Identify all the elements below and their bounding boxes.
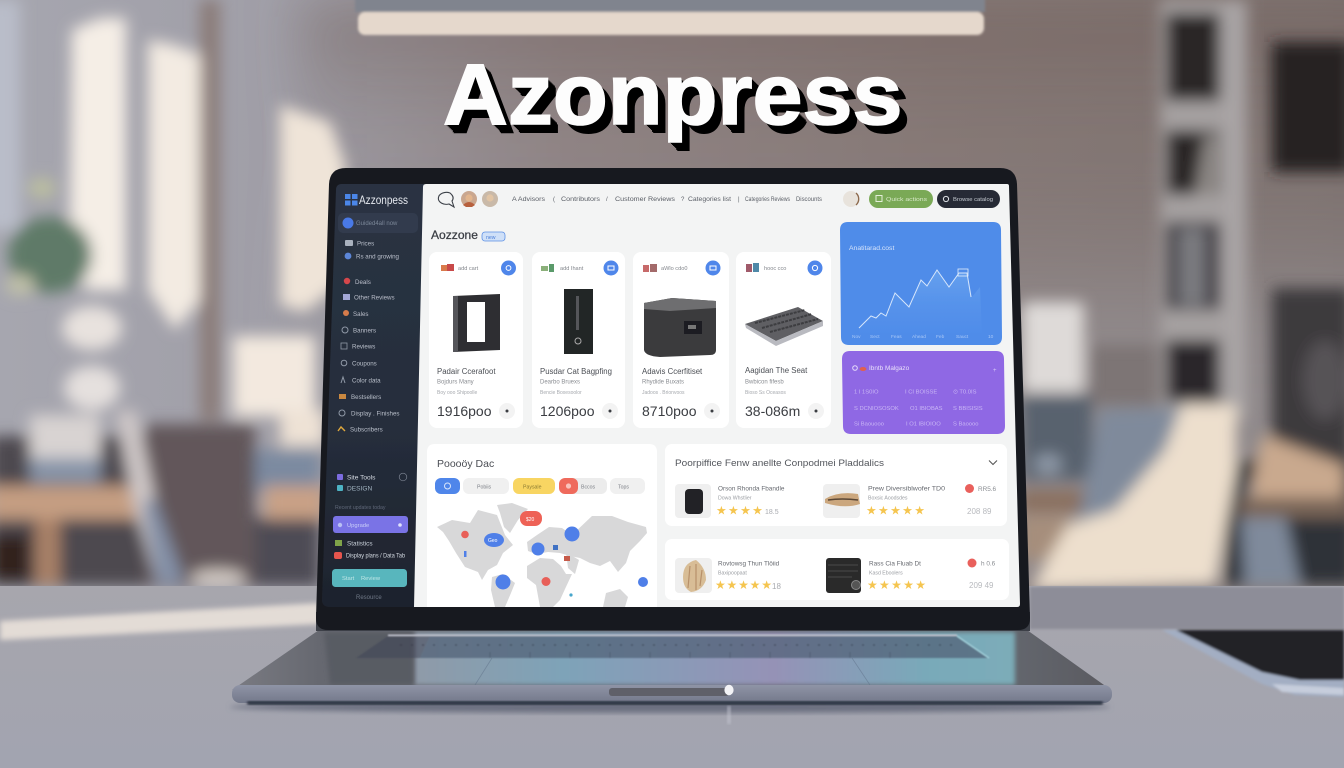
analytics chart card: Anatitarad.cost xyxy=(849,245,894,252)
product card 1: Bojdurs Many xyxy=(437,380,474,386)
purple stats card xyxy=(842,351,1005,434)
dark button: Browse catalog xyxy=(953,197,993,203)
product row D: Kasd Eboolers xyxy=(869,570,903,576)
top navigation bar: ? xyxy=(681,197,685,203)
product image: keypad xyxy=(745,307,823,346)
product card 4 xyxy=(736,252,831,428)
top navigation bar: Categories list xyxy=(688,197,731,203)
green button xyxy=(869,190,933,208)
sidebar navigation: Subscribers xyxy=(350,426,383,434)
trackpad xyxy=(475,658,870,685)
map markers: Geo xyxy=(488,538,498,544)
product card 3: aWlo cdo0 xyxy=(661,266,687,272)
top navigation bar xyxy=(438,190,1000,208)
sidebar navigation: Bestsellers xyxy=(351,394,381,401)
product card 1: Boy ooo Shipoolle xyxy=(437,390,478,396)
hinge xyxy=(316,612,1030,631)
product row D: Rass Cia Fluab Dt xyxy=(869,560,921,568)
map card xyxy=(427,444,657,607)
front notch xyxy=(609,685,734,724)
purple stats card: ⊙ T0.0IS xyxy=(953,390,977,396)
purple stats card: S Baoooo xyxy=(953,422,978,428)
purple stats card: S BBISISIS xyxy=(953,406,983,412)
product image: printer xyxy=(644,298,716,357)
product card 4: hooc cco xyxy=(764,266,786,272)
sidebar navigation: Display . Finishes xyxy=(351,410,400,418)
sidebar logo: Azzonpess xyxy=(359,193,408,207)
laptop base xyxy=(230,630,1112,724)
purple stats card: S DCNIOSOSOK xyxy=(854,406,899,412)
sidebar statistics rows xyxy=(334,540,405,560)
product row B: ★★★★★ xyxy=(866,504,926,518)
map markers xyxy=(461,511,648,597)
product card 2: 1206poo xyxy=(540,403,595,419)
analytics chart card: Feb xyxy=(936,334,945,340)
product row D xyxy=(826,558,927,593)
title: Azonpress: Azonpress xyxy=(443,47,902,143)
product row C: Baxipoopaat xyxy=(718,570,747,576)
avatars xyxy=(461,191,498,207)
heart and price B: h 0.6 xyxy=(981,560,996,568)
purple stats card: Si Baouooo xyxy=(854,422,884,428)
product row C xyxy=(675,558,781,593)
purple stats card: O1 IBIOBAS xyxy=(910,406,943,412)
filter pills: Bccos xyxy=(581,484,596,490)
product card 4: 38-086m xyxy=(745,403,800,419)
product card 2: Bencie Boxesoolor xyxy=(540,390,582,396)
sidebar logo xyxy=(345,193,408,207)
analytics chart card: Feas xyxy=(891,334,902,340)
sidebar navigation: Reviews xyxy=(352,344,375,350)
product card 1: add cart xyxy=(458,266,479,272)
filter pills: Paysale xyxy=(523,484,542,490)
start review button: Review xyxy=(361,576,381,582)
product card 4: Aagidan The Seat xyxy=(745,366,808,375)
laptop xyxy=(230,168,1112,724)
product image: frame xyxy=(453,294,500,352)
page heading: new xyxy=(486,235,496,241)
product card 2: Pusdar Cat Bagpfing xyxy=(540,367,612,376)
sidebar statistics rows: Statistics xyxy=(347,540,373,548)
sidebar tools: Site Tools xyxy=(347,474,376,482)
analytics chart card: Sect xyxy=(870,334,880,340)
sidebar navigation: Other Reviews xyxy=(354,294,395,302)
product card 1 xyxy=(429,252,523,428)
heart and price A xyxy=(965,484,997,516)
sidebar navigation xyxy=(338,240,400,434)
sidebar account row: Guided4all now xyxy=(356,221,398,227)
sidebar navigation: Deals xyxy=(355,279,371,286)
product card 3: Adavis Ccerfitiset xyxy=(642,367,703,376)
sidebar navigation: Banners xyxy=(353,328,376,334)
analytics chart card: 10 xyxy=(988,334,994,340)
main panel xyxy=(414,184,1020,607)
purple stats card: 1 I 1S0IO xyxy=(854,390,879,396)
purple stats card: Ibntb Malgazo xyxy=(869,365,910,372)
analytics chart card: Nov xyxy=(852,334,861,340)
top navigation bar: Categories Reviews xyxy=(745,197,790,203)
purple stats card: I CI BOISSE xyxy=(905,390,937,396)
upgrade button: Upgrade xyxy=(347,523,369,529)
product card 2 xyxy=(532,252,625,428)
sidebar statistics rows: Display plans / Data Tab xyxy=(346,552,405,560)
analytics chart card: Ahead xyxy=(912,334,926,340)
analytics chart card xyxy=(840,222,1002,345)
dark button xyxy=(937,190,1000,208)
area line chart xyxy=(859,269,982,333)
map markers: $20 xyxy=(526,517,535,523)
product row B xyxy=(823,484,945,518)
product row C: 18 xyxy=(772,582,781,591)
product card 3: 8710poo xyxy=(642,403,697,419)
keyboard xyxy=(356,634,989,658)
page heading xyxy=(431,230,505,242)
purple stats card: + xyxy=(993,368,997,374)
product image: black device xyxy=(564,289,593,354)
product row A: 18.5 xyxy=(765,509,779,516)
top navigation bar: ( xyxy=(553,197,555,203)
sidebar xyxy=(322,184,424,607)
popular products card top xyxy=(665,444,1007,526)
desk surface xyxy=(0,586,1344,768)
top navigation bar: Customer Reviews xyxy=(615,197,675,203)
product row A xyxy=(675,484,785,518)
sidebar footer: Resource xyxy=(356,595,382,601)
analytics chart card: Sauct xyxy=(956,334,969,340)
sidebar tools xyxy=(335,473,407,511)
heart and price B: 209 49 xyxy=(969,581,994,590)
product row A: Orson Rhonda Fbandle xyxy=(718,486,785,492)
sidebar navigation: Rs and growing xyxy=(356,254,400,260)
sidebar navigation: Sales xyxy=(353,311,368,318)
ceiling light fixture xyxy=(355,0,985,35)
top navigation bar: Discounts xyxy=(796,197,822,203)
top navigation bar: Contributors xyxy=(561,197,600,203)
heart and price A: 208 89 xyxy=(967,507,992,516)
filter pills: Pobiis xyxy=(477,484,492,490)
product card 2: Dearbo Bruexs xyxy=(540,380,580,386)
sidebar navigation: Color data xyxy=(352,378,381,384)
popular products card top: Poorpiffice Fenw anellte Conpodmei Pladdalics xyxy=(675,457,884,468)
map card: Poooöy Dac xyxy=(437,458,494,470)
sidebar tools: Recent updates today xyxy=(335,505,386,511)
heart and price B xyxy=(968,558,996,590)
product card 4: Bioso Ss Oceasos xyxy=(745,390,786,396)
product card 4: Bwbicon fifesb xyxy=(745,380,784,386)
sidebar navigation: Prices xyxy=(357,240,374,248)
top navigation bar: / xyxy=(606,197,608,203)
product card 1: Padair Ccerafoot xyxy=(437,367,496,376)
product row C: Rovtowsg Thun Tlôiid xyxy=(718,560,780,568)
sidebar tools: DESIGN xyxy=(347,486,373,492)
top navigation bar: A Advisors xyxy=(512,197,545,203)
upgrade button xyxy=(333,516,408,533)
screen dashboard xyxy=(322,184,1020,607)
start review button xyxy=(332,569,407,587)
product card 2: add Ihant xyxy=(560,266,584,272)
product row B: Prew Diversiblwofer TD0 xyxy=(868,486,945,492)
world map xyxy=(437,503,647,607)
purple stats card: I O1 IBIOIOO xyxy=(906,422,941,428)
popular products card bottom xyxy=(665,539,1009,600)
top navigation bar: | xyxy=(738,197,740,203)
tablet on desk xyxy=(1162,630,1344,697)
product card 3 xyxy=(633,252,729,428)
filter pills: Tops xyxy=(618,484,629,490)
heart and price A: RR5.6 xyxy=(978,486,997,493)
product row D: ★★★★★ xyxy=(867,578,927,592)
laptop lid bezel xyxy=(316,168,1030,630)
product row A: ★★★★ xyxy=(716,504,764,518)
product card 3: Rhydide Buxats xyxy=(642,380,684,386)
product row C: ★★★★★ xyxy=(715,578,773,592)
product card 3: Jadoos . Brionvoos xyxy=(642,390,685,396)
page heading: Aozzone xyxy=(431,230,478,242)
start review button: Start xyxy=(342,576,355,582)
filter pills xyxy=(435,478,645,494)
sidebar account row xyxy=(338,213,418,233)
product row A: Dowa Whstlier xyxy=(718,496,752,502)
product card 1: 1916poo xyxy=(437,403,492,419)
product row B: Boxsic Aoodsdes xyxy=(868,496,908,502)
green button: Quick actions xyxy=(886,197,927,203)
sidebar navigation: Coupons xyxy=(352,360,377,368)
